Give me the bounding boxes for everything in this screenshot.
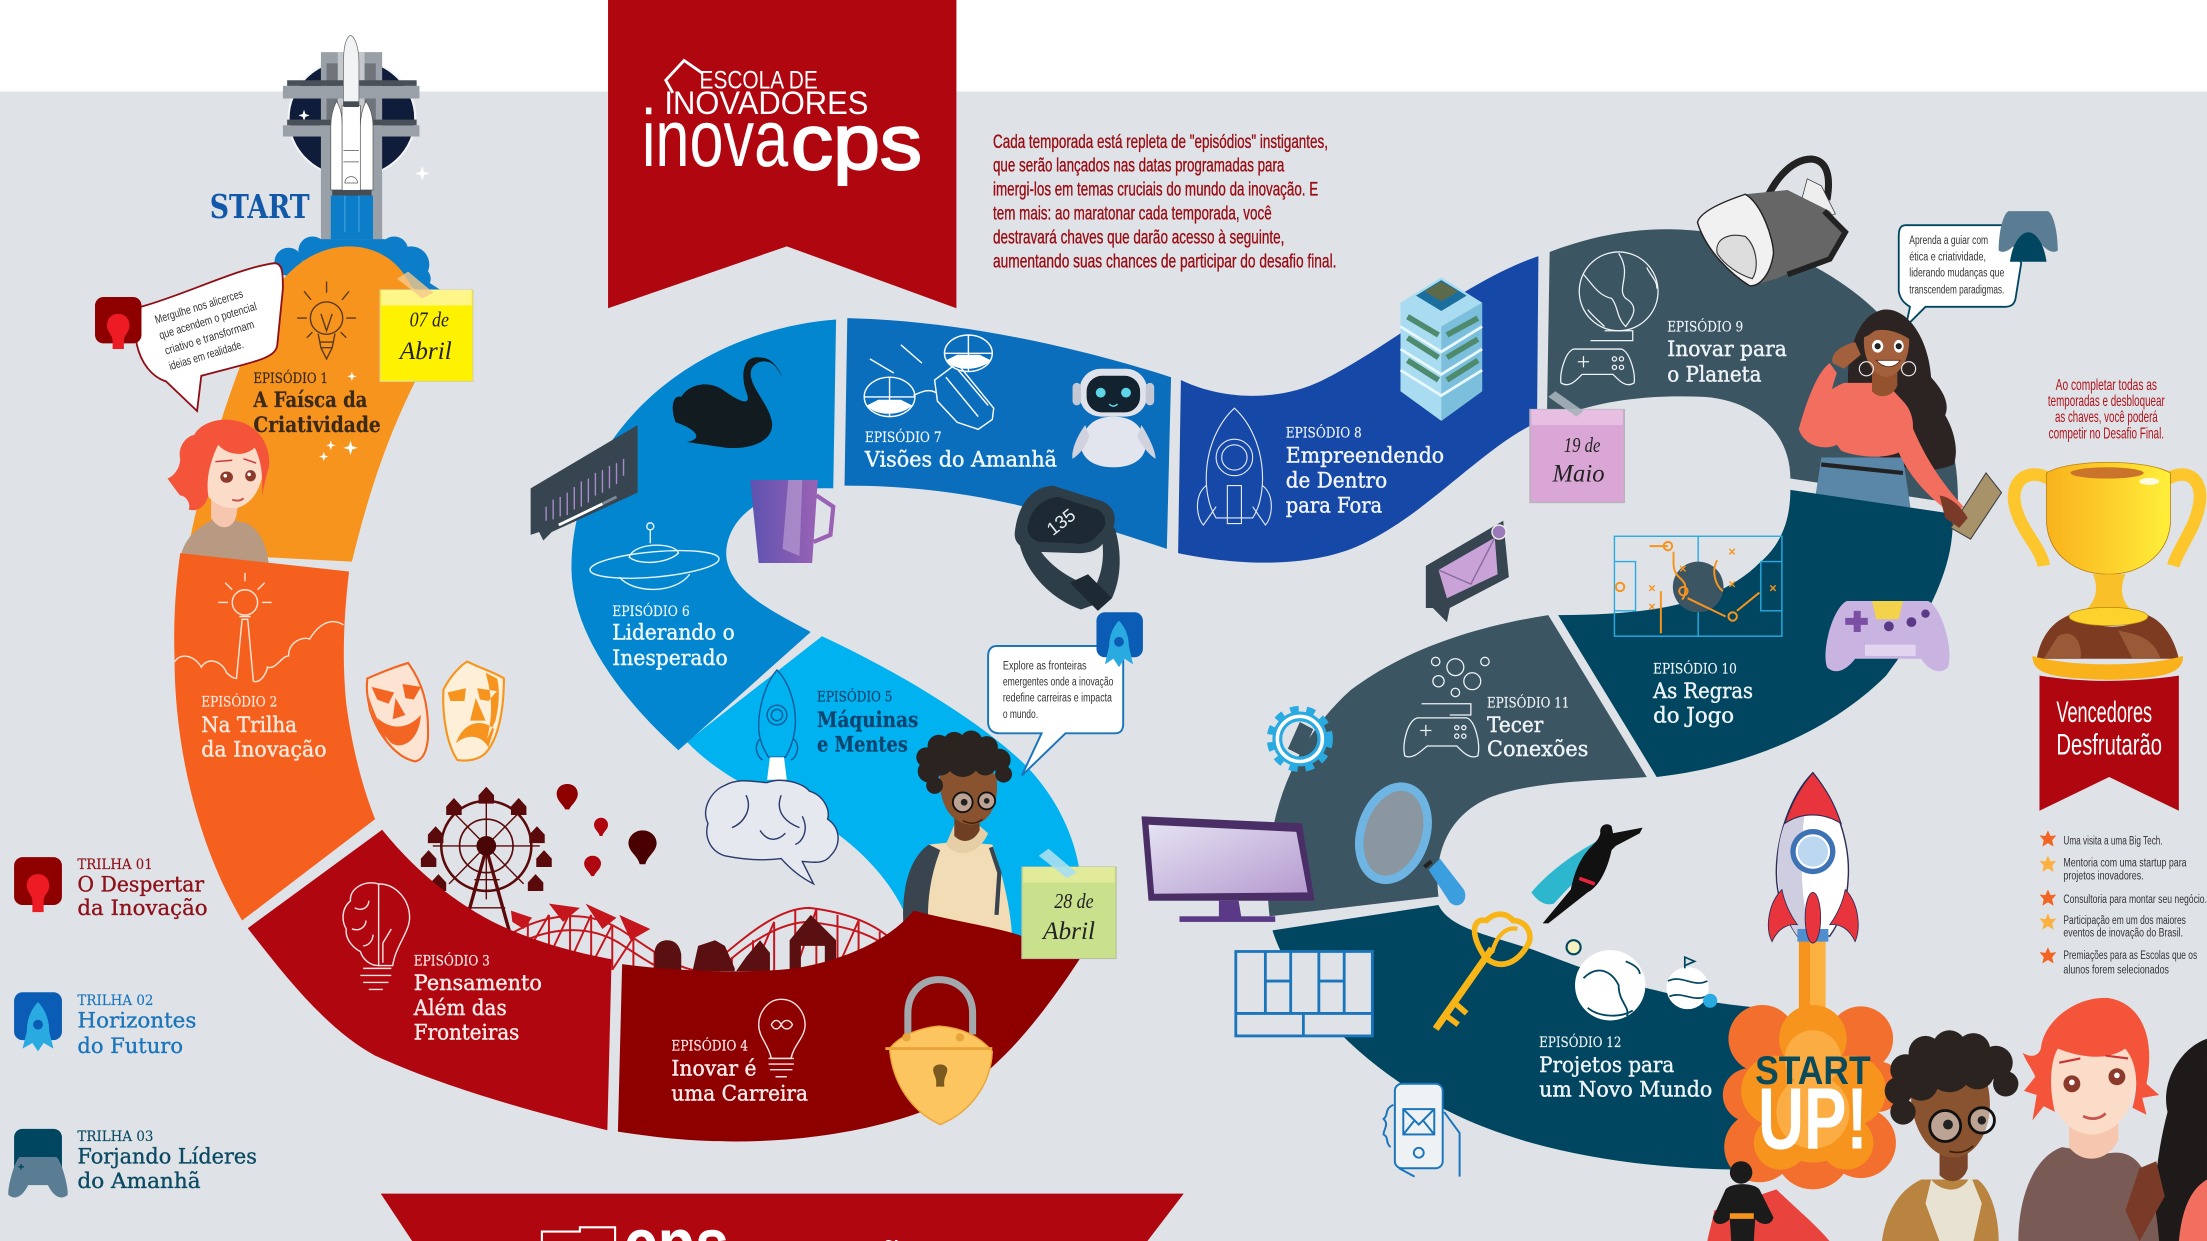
episode 5 text: EPISÓDIO 5 (817, 688, 892, 706)
intro paragraph: Cada temporada está repleta de "episódios" instigantes, (993, 132, 1328, 153)
benefits list (2039, 830, 2207, 976)
curly boy (1882, 1030, 2018, 1241)
episode 5 text: e Mentes (817, 732, 908, 757)
episode 4 date note: 28 de (1054, 889, 1094, 913)
watch band (1019, 528, 1120, 609)
book in hand (1940, 473, 2001, 539)
phone icon (1384, 1084, 1460, 1177)
computer monitor (1142, 816, 1315, 922)
episode 4 text (671, 1037, 808, 1106)
flame and start up cloud: UP! (1758, 1071, 1868, 1168)
episode 5 text: Máquinas (817, 707, 919, 732)
episode 11 text (1487, 693, 1588, 761)
final challenge note: Ao completar todas as (2056, 377, 2157, 394)
episode 3 text: Fronteiras (414, 1019, 519, 1044)
bubble text: o mundo. (1003, 708, 1038, 721)
winners ribbon (2039, 676, 2179, 811)
episode 6 icon: ufo (589, 523, 720, 589)
episode 9 text (1667, 317, 1787, 386)
launch smoke clouds (274, 236, 441, 290)
episode 12 panel (1272, 905, 1759, 1170)
episode 7 text (864, 428, 1057, 472)
episode 1 text: Criatividade (253, 412, 381, 437)
trilhas legend (8, 857, 257, 1197)
sparkles (319, 372, 358, 461)
episode 1 speech bubble (137, 263, 283, 411)
episode 8 text: para Fora (1286, 492, 1382, 517)
episode 6 icon: black swan (673, 357, 783, 448)
logo house icon (666, 61, 702, 93)
episode 10 icon: tactics board: × (1648, 600, 1656, 614)
trophy stem and foot (2080, 574, 2137, 614)
episode 4 date note: Abril (1041, 917, 1095, 945)
episode 7 panel (845, 318, 1171, 549)
trophy cup (2047, 462, 2170, 574)
episode 10 text: do Jogo (1653, 703, 1734, 728)
pedestal (2037, 615, 2179, 659)
bubble text: transcendem paradigmas. (1909, 283, 2004, 296)
logo text: inova (642, 94, 788, 184)
intro paragraph: imergi-los em temas cruciais do mundo da inovação. E (993, 180, 1318, 201)
legend item: trilha 03: Forjando Líderes (77, 1143, 257, 1168)
ferris cabins (421, 787, 552, 891)
episode 3 text: Pensamento (414, 970, 542, 995)
theatre masks (367, 662, 504, 761)
legend item: trilha 02 (14, 992, 196, 1058)
episode 11 panel (1268, 615, 1647, 916)
standing superhero (1707, 1161, 1830, 1241)
episode 8 panel (1178, 256, 1538, 563)
roller coaster and carousel (510, 904, 892, 978)
list text: Uma visita a uma Big Tech. (2063, 834, 2163, 848)
episode 10 icon: tactics board (1614, 536, 1782, 636)
episode 5 panel (687, 636, 1081, 943)
episode 11 text: EPISÓDIO 11 (1487, 693, 1569, 711)
episode 10 text (1652, 659, 1753, 728)
flying superhero (1531, 824, 1643, 923)
outer cloud (1723, 1005, 1903, 1189)
bubble text (1003, 659, 1113, 721)
magnifying glass (1348, 778, 1465, 905)
hero body (1543, 824, 1643, 923)
episode 4 text: Inovar é (671, 1055, 757, 1080)
episode 10 icon: tactics board: × (1728, 545, 1736, 559)
episode 10 icon: tactics board: × (1769, 582, 1777, 596)
message icon (1426, 521, 1509, 622)
top red banner with logo (608, 0, 956, 308)
legend item: trilha 02: Horizontes (77, 1007, 196, 1032)
episode 9 speech bubble (1899, 225, 2021, 327)
bottom red banner (381, 1194, 1184, 1241)
keyboard icon (1236, 951, 1372, 1036)
episode 12 text: Projetos para (1539, 1052, 1674, 1077)
episode 4 icon: infinity bulb (759, 999, 805, 1077)
episode 9 text: o Planeta (1667, 361, 1762, 386)
legend item: trilha 01: TRILHA 01 (77, 857, 153, 873)
bubble icon: trilha 03 (1999, 211, 2058, 262)
episode 1 date note: Abril (398, 337, 452, 365)
planets (1567, 940, 1717, 1020)
episode 6 text: EPISÓDIO 6 (612, 602, 690, 620)
episode 3 text: EPISÓDIO 3 (414, 952, 490, 970)
episode 9 icon: globe and controller (1561, 252, 1658, 385)
episode 6 icon: audio panel (531, 425, 638, 540)
episode 10 icon: tactics board: × (1728, 577, 1736, 591)
intro paragraph: aumentando suas chances de participar do desafio final. (993, 251, 1336, 272)
episode 3 text: Além das (413, 995, 507, 1020)
start label: START (210, 188, 310, 226)
episode 11 icon: network and controller (1404, 657, 1489, 757)
final challenge note (2048, 377, 2165, 442)
episode 1 text: A Faísca da (253, 387, 368, 412)
episode 1 date note (380, 272, 473, 381)
tragedy mask (443, 662, 504, 761)
episode 11 text: Tecer (1487, 712, 1544, 737)
episode 12 text: EPISÓDIO 12 (1539, 1033, 1621, 1051)
episode 8 text: de Dentro (1286, 468, 1387, 493)
episode 2 icon: tower and clouds (175, 573, 343, 682)
intro paragraph: que serão lançados nas datas programadas para (993, 156, 1285, 177)
legend item: trilha 01 (14, 857, 208, 920)
legend item: trilha 02: TRILHA 02 (77, 993, 153, 1009)
red-haired girl (2018, 998, 2165, 1241)
purple game controller (1825, 601, 1949, 671)
big rocket (1768, 773, 1858, 943)
legend item: trilha 01: O Despertar (77, 872, 205, 897)
logo text: cps (791, 100, 922, 186)
episode 3 text (413, 952, 542, 1044)
logo text (642, 67, 922, 186)
legend item: trilha 02: do Futuro (77, 1033, 183, 1058)
episode 1 text: EPISÓDIO 1 (253, 369, 328, 387)
episode 5 icon: rocket over brain (706, 670, 838, 884)
episode 2 text: Na Trilha (201, 712, 297, 737)
episode 12 text: um Novo Mundo (1539, 1076, 1712, 1101)
winners ribbon: Desfrutarão (2056, 728, 2162, 761)
launch rocket on tower (274, 35, 441, 290)
episode 5 text (817, 688, 919, 757)
character: curly-haired boy (903, 730, 1012, 936)
episode 6 panel (571, 320, 836, 750)
intro paragraph: destravará chaves que darão acesso à seguinte, (993, 227, 1284, 248)
legend item: trilha 03: do Amanhã (77, 1168, 201, 1193)
bubble text: redefine carreiras e impacta (1003, 692, 1112, 705)
episode 10 panel (1558, 490, 1953, 777)
episode 7 icon: robot (1072, 369, 1156, 467)
list text: projetos inovadores. (2063, 869, 2144, 883)
character: red-haired girl (168, 420, 269, 566)
episode 10 text: As Regras (1652, 678, 1753, 703)
episode 2 text (201, 693, 327, 762)
smartwatch: 135 (1042, 504, 1079, 539)
episode 8 icon: rocket outline (1197, 408, 1271, 525)
grey body (1745, 190, 1845, 286)
bubble text: emergentes onde a inovação (1003, 675, 1113, 688)
watch case (1015, 486, 1115, 553)
bubble text: Explore as fronteiras (1003, 659, 1087, 672)
comedy mask (367, 663, 428, 761)
episode 10 icon: tactics board: × (1679, 562, 1687, 576)
characters group at bottom right (1882, 998, 2207, 1241)
intro paragraph: tem mais: ao maratonar cada temporada, você (993, 204, 1272, 225)
character: woman with long hair (1799, 309, 1963, 515)
list text (2063, 834, 2207, 976)
white visor (1697, 194, 1773, 286)
episode 2 text: da Inovação (201, 737, 327, 762)
episode 4 text: EPISÓDIO 4 (671, 1037, 748, 1055)
bubble text: que acendem o potencial (158, 300, 258, 342)
episode 10 icon: tactics board: × (1648, 582, 1656, 596)
episode 4 date note (1022, 849, 1116, 959)
episode 9 date note (1530, 391, 1624, 502)
episode 6 text: Liderando o (612, 620, 735, 645)
logo text: ESCOLA DE (700, 67, 818, 95)
smartwatch (1015, 486, 1120, 611)
episode 12 text (1539, 1033, 1712, 1101)
bubble icon: trilha 01 (95, 297, 141, 349)
bubble text: Mergulhe nos alicerces (153, 287, 245, 327)
legend item: trilha 03 (8, 1129, 257, 1197)
server tower (1400, 277, 1482, 421)
trophy on pedestal (2014, 462, 2200, 680)
episode 6 text: Inesperado (612, 645, 728, 670)
episode 3 icon: brain bulb (343, 883, 410, 989)
episode 10 text: EPISÓDIO 10 (1653, 659, 1737, 677)
curly hair (916, 730, 1012, 794)
episode 2 text: EPISÓDIO 2 (201, 693, 277, 711)
episode 9 panel (1547, 229, 1958, 504)
episode 7 text: EPISÓDIO 7 (865, 428, 942, 446)
list text: alunos forem selecionados (2063, 962, 2169, 976)
episode 11 text: Conexões (1487, 736, 1588, 761)
hero cape (1531, 840, 1605, 904)
episode 1 icon: light bulb (297, 282, 356, 359)
light cloud core (1776, 1030, 1849, 1149)
legend item: trilha 01: da Inovação (77, 895, 208, 920)
episode 1 date note: 07 de (410, 308, 449, 332)
inner cloud (1741, 1005, 1886, 1170)
episode 7 text: Visões do Amanhã (864, 447, 1057, 472)
start up label: START (1755, 1049, 1871, 1093)
gear icon (1270, 709, 1329, 768)
third character: woman (2151, 1039, 2207, 1241)
trophy handles (2014, 475, 2200, 566)
bubble icon: trilha 02 (1096, 612, 1143, 667)
episode 8 text (1286, 424, 1444, 517)
vr headset (1697, 159, 1845, 286)
flame and start up cloud (1723, 936, 1903, 1189)
episode 1 panel (187, 246, 422, 562)
bubble text (153, 287, 258, 373)
episode 6 text (612, 602, 735, 670)
episode 9 text: EPISÓDIO 9 (1667, 317, 1743, 335)
episode 5 speech bubble (988, 646, 1123, 776)
episode 9 date note: 19 de (1564, 433, 1600, 457)
list stars (2039, 830, 2056, 963)
ferris wheel and balloons (421, 784, 657, 957)
intro paragraph (993, 132, 1336, 272)
padlock (885, 980, 992, 1125)
episode 4 text: uma Carreira (671, 1081, 808, 1106)
bubble text: ideias em realidade. (167, 338, 245, 373)
legend item: trilha 03: TRILHA 03 (77, 1129, 153, 1145)
bubble text: liderando mudanças que (1909, 267, 2004, 280)
hot air balloons (557, 784, 657, 876)
logo text: INOVADORES (664, 85, 868, 121)
episode 8 text: Empreendendo (1286, 442, 1444, 467)
curly hair (1885, 1030, 2018, 1125)
episode 3 panel (248, 830, 612, 1130)
top strap (1762, 159, 1829, 211)
bubble text: ética e criatividade, (1909, 250, 1986, 263)
white pad (1802, 179, 1835, 220)
bubble text: Aprenda a guiar com (1909, 234, 1988, 247)
bubble text (1909, 234, 2004, 296)
episode 4 panel (618, 911, 1081, 1141)
episode 6 icon: purple mug (750, 480, 833, 563)
episode 1 text (253, 369, 381, 437)
golden key (1436, 914, 1530, 1029)
episode 9 date note: Maio (1552, 459, 1605, 487)
episode 8 text: EPISÓDIO 8 (1286, 424, 1362, 442)
episode 2 panel (174, 553, 375, 921)
episode 7 icon: flying car (864, 335, 994, 429)
episode 9 text: Inovar para (1667, 336, 1787, 361)
bubble text: criativo e transformam (163, 318, 256, 358)
